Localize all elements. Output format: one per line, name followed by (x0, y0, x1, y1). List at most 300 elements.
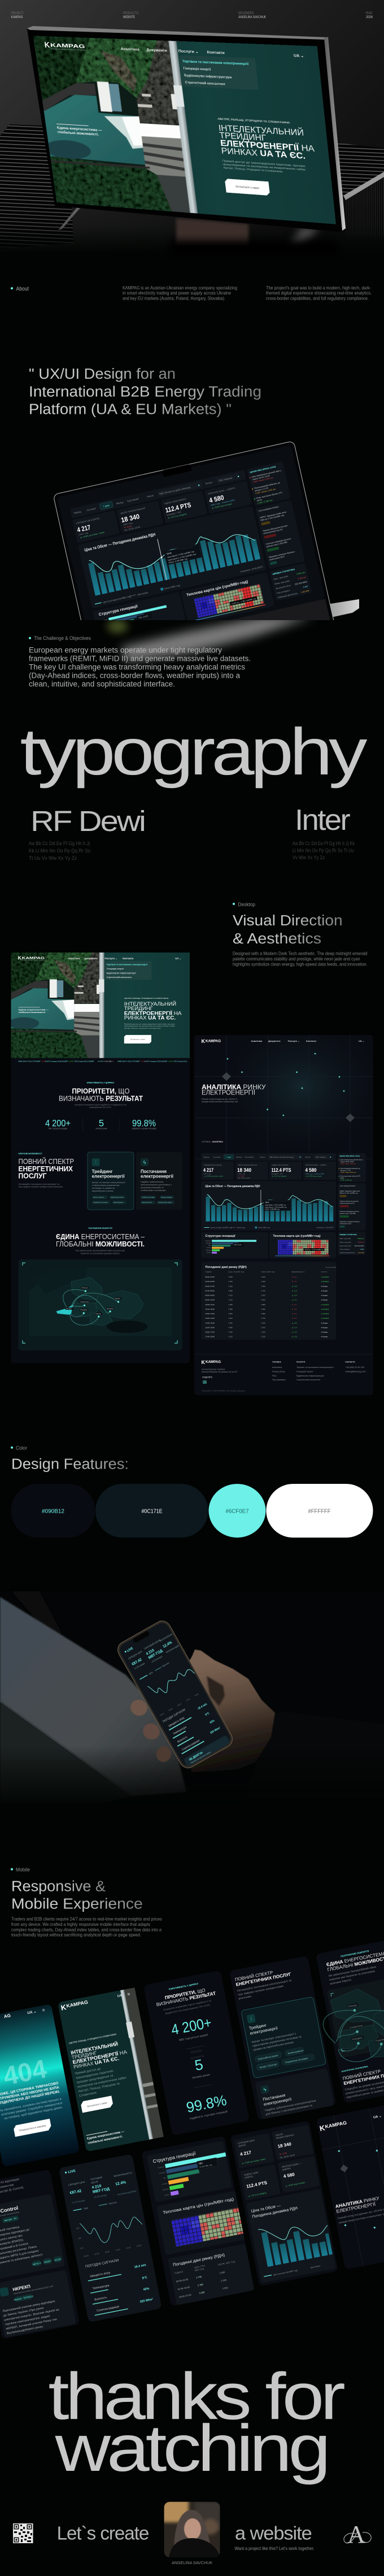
mobile screen: 404: Повернутися в мережу (19, 2124, 47, 2132)
footer: Стратегічний консалтинг (296, 1379, 321, 1381)
ticker: HUPX Hungary €128,40/МВТ +3,4% (145, 1060, 173, 1063)
mobile screen: live market: 4 210 (91, 2184, 102, 2190)
analytics heading: АНАЛІТИКА РИНКУ (202, 1083, 266, 1091)
mobile screen: KPI cards and chart: ІНДЕКС ЦІНИ (244, 2171, 259, 2176)
generation panel: Сонячна (158, 2166, 165, 2169)
section heading: Mobile, Responsive & Mobile Experience (11, 1867, 162, 1938)
phone: 9°C (204, 1712, 211, 1717)
challenge paragraph: The key UI challenge was transforming heavy analytical metrics (29, 663, 245, 672)
mobile screen: live market: ПОГОДНІ СИГНАЛИ (85, 2258, 119, 2269)
mobile screen: services (229, 1956, 337, 2120)
ticker: КИЇВ DAM 4 632,5 ГРН/МВТ -1,2% (117, 1060, 145, 1063)
challenge paragraph (29, 646, 251, 689)
footer: ПОСЛУГИ (296, 1361, 306, 1363)
phone: Прогноз (162, 1661, 169, 1668)
analytics nav: K (201, 1038, 206, 1044)
map panel (18, 1259, 182, 1350)
service card: trading: потоками та цінами на (92, 1187, 115, 1189)
generation panel: ГЕС (199, 2162, 203, 2165)
services heading: ЕНЕРГЕТИЧНИХ (18, 1164, 73, 1173)
section heading: Mobile, Responsive & Mobile Experience: Traders and B2B clients require 24/7 access to real-time market insights and prices (11, 1916, 162, 1922)
about text column 1: KAMPAG is an Austrian-Ukrainian energy company specializing (123, 285, 237, 291)
label: About: About (16, 286, 29, 292)
stats row: 5 (99, 1118, 104, 1128)
phone: Прогноз на наступну годину (190, 1751, 211, 1764)
mobile screen: stats: 4 200+ (170, 2014, 213, 2038)
photo: phone in hand on fabric (0, 1591, 276, 1796)
footer: ГОЛОВНА (272, 1361, 281, 1363)
mobile screen: KPI cards and chart: Ціна сьогодні (грн/МВт·год) (273, 2269, 298, 2276)
mobile screen: live market: Швидкість вітру (90, 2271, 111, 2278)
mobile screen: hero: KAMPAG (66, 1999, 89, 2009)
mobile screen: KPI cards and chart: (BASE) (238, 2143, 247, 2148)
mobile screen: services: Управління потоками (285, 2057, 308, 2064)
heading: priorities: Конкретні показники нашої надійності та відкритості на (75, 1103, 126, 1106)
footer: Торгівля та постачання електроенергії (296, 1366, 334, 1369)
phone: LIVE (126, 1647, 134, 1653)
mobile screen: live market: +2.1% вчора (72, 2199, 85, 2204)
analytics nav: KAMPAG (206, 1039, 221, 1044)
mobile screen: live market: Ціна (84, 2207, 89, 2210)
mobile screen: hero: ТРЕЙДИНГ (71, 2050, 97, 2060)
swatch: #FFFFFF: #FFFFFF (308, 1508, 331, 1515)
mobile screen: hero: глобальні можливості. (88, 2135, 123, 2145)
project meta labels (11, 11, 373, 19)
service card: supply: прозорим ринковим та (141, 1186, 164, 1189)
mobile screen: stats: Надійність торгових операцій (189, 2110, 228, 2121)
services heading: ПОВНИЙ СПЕКТР (18, 1157, 74, 1166)
mobile screen: KPI cards and chart: Ціна вчора (310, 2265, 320, 2269)
mobile screen: services: Європейські ринки (258, 2054, 278, 2060)
mobile screen: live market: 18.4 m/s (134, 2263, 146, 2269)
mobile screen: services: Оптимізуйте постачання електроенергії та (237, 1978, 292, 1993)
mobile screen: regulators: електричної енергії». Власник ліцензії на (4, 2308, 59, 2322)
mobile screen: live market: Температура (92, 2284, 110, 2291)
generation panel (147, 2141, 232, 2202)
ticker: TGE Poland €112,45/МВТ (74, 1060, 94, 1063)
heatmap panel: Теплова карта цін (грн/МВт·год) (162, 2196, 234, 2215)
phone: внутрішньодоб. (165, 1643, 180, 1653)
mobile screen: live market: 9°C (142, 2276, 147, 2280)
mobile screen: KPI cards and chart: ФІНАНСУВАННЯ (276, 2133, 294, 2140)
mobile screen: live market: €87.42 (69, 2189, 82, 2195)
mobile screen: live market: 600 (76, 2227, 80, 2230)
service card: trading: Трейдинг (92, 1169, 113, 1174)
closing title: thanks for watching (48, 2359, 345, 2485)
heading: priorities: ПРІОРИТЕТИ, ЩО (72, 1086, 130, 1096)
mobile screen: services: для бізнесу з прозорим ринковим та (265, 2104, 313, 2116)
ticker: TGE Poland €112 (173, 1060, 187, 1063)
mobile screen: live market: LIVE (68, 2170, 76, 2174)
section heading: Mobile, Responsive & Mobile Experience: touch-friendly layout without sacrificing analytical depth or page speed. (11, 1932, 141, 1938)
analytics heading: ЕЛЕКТРОЕНЕРГІЇ (202, 1089, 256, 1097)
platform: striped stand surface right (333, 142, 384, 198)
mobile screen: services: ефективним управлінням потоками та (252, 2035, 302, 2048)
about text column 1: and key EU markets (Austria, Poland, Hungary, Slovakia). (123, 295, 225, 301)
designer name: ANGELINA SAVCHUK (172, 2560, 212, 2565)
swatch: #090B12: #090B12 (42, 1508, 64, 1515)
mobile screen: live market: внутрішньодобова (117, 2189, 137, 2196)
mobile screen: services: газу завдяки гнучким трейдинговим (238, 1984, 284, 1997)
mobile screen: services: ЕНЕРГЕТИЧНИХ ПОСЛУГ (235, 1972, 292, 1988)
generation panel: Теплова (159, 2171, 165, 2175)
footer: Будівництво інфраструктури (296, 1375, 324, 1377)
phone: СЕРЕДНЯ ЦІНА (128, 1649, 143, 1660)
mobile screen: analytics hero: UA ⌄ (373, 2115, 382, 2119)
analytics heading: трендів енергосистеми в реальному часі. (202, 1101, 238, 1103)
footer: Інтелектуальна торгівля (202, 1368, 225, 1370)
mobile screen: stats: відкритості на енергоринках UA та ЄС. (165, 2003, 211, 2015)
mobile screen: KPI cards and chart: Пік: 18:00–19:00 (280, 2154, 295, 2159)
section heading: Desktop, Visual Direction & Aesthetics: & Aesthetics (233, 931, 321, 947)
mobile screen: hero: UA (117, 1994, 123, 1998)
mobile screen: KPI cards and chart (230, 2120, 338, 2287)
section heading: Color, Design Features: Color (16, 1445, 27, 1452)
mobile screen: hero: ЕЛЕКТРОЕНЕРГІЇ НА (72, 2049, 128, 2065)
analytics nav: Контакти (306, 1040, 316, 1042)
mobile screen: live market: ВОЛАТИЛЬНІСТЬ (114, 2171, 133, 2177)
mobile screen: stats: ВИЗНАЧАЮТЬ РЕЗУЛЬТАТ (156, 1990, 217, 2007)
mobile screen: regulators: ACER (54, 2258, 61, 2262)
mobile screen: hero: АВСТРІЇ, ПОЛЬЩІ, УГОРЩИНИ ТА СЛОВАЧЧИНИ. (69, 2033, 117, 2045)
hand (128, 1649, 275, 1772)
phone: 42% (209, 1719, 216, 1725)
phone: 08:00 (177, 1703, 182, 1707)
mobile screen: KPI cards and chart: ▼ -3.2% (279, 2152, 287, 2155)
mobile screen: map: АНАЛІТИЧНА ПЛАТФОРМА (341, 2066, 368, 2073)
quote heading: " UX/UI Design for an (29, 366, 176, 382)
quote heading: International B2B Energy Trading (29, 384, 261, 400)
mobile screen: regulators: REMIT (44, 2259, 51, 2263)
mobile screen: stats: Активні ринки (192, 2073, 211, 2080)
hero screenshot (8, 953, 190, 1058)
table panel: ЦІНА, ГРН/ (194, 2265, 206, 2269)
table panel: 2 500 (221, 2279, 226, 2282)
section heading: Mobile, Responsive & Mobile Experience: Mobile (16, 1867, 30, 1873)
table panel: 2 500 (219, 2271, 225, 2275)
phone: ЗБ ДВИГУН (189, 1751, 204, 1762)
service card: trading: ⫶ (95, 1160, 97, 1165)
table panel: 2 740 (196, 2275, 202, 2279)
mobile screen: live market (59, 2154, 162, 2322)
footer (201, 1360, 366, 1392)
service card: trading: Імпорт | Експорт (93, 1196, 104, 1198)
mobile screen: 404 (0, 2004, 80, 2167)
footer: КОНТАКТИ (346, 1361, 355, 1363)
heading: unified energy system: ЄДИНА ЕНЕРГОСИСТЕМА – (56, 1232, 145, 1241)
ticker: HUPX Hungary €128,40/МВТ +3,4% (45, 1060, 73, 1063)
footer: Генерація енергії (296, 1370, 313, 1373)
panel: desktop analytics page (194, 1035, 373, 1395)
mobile screen: hero: експертиза на енергетичних хабах (77, 2076, 126, 2089)
generation panel: Імпорт (164, 2193, 170, 2197)
mobile screen: regulators: Внутрішньодобового ринку. (7, 2325, 43, 2335)
service card: supply: Прозорі тарифи (161, 1196, 172, 1198)
mobile screen: stats: Конкретні показники нашої надійності та (163, 1999, 212, 2011)
quote heading: Platform (UA & EU Markets) " (29, 401, 232, 417)
color swatches (11, 1484, 373, 1538)
font sample: RF Dewi: Tt Uu Vv Ww Xx Yy Zz (29, 855, 77, 861)
mobile screen: analytics hero: ЕЛЕКТРОЕНЕРГІЇ (336, 2201, 376, 2214)
about text column 2: The project's goal was to build a modern, high-tech, dark- (266, 285, 371, 291)
service card: trading: європейських ринках. (92, 1189, 114, 1192)
panel: desktop homepage (8, 953, 190, 1363)
mobile screen: KPI cards and chart: 4 580 (283, 2172, 295, 2179)
mobile screen: KPI cards and chart: СЕРЕДНЯ ЦІНА (238, 2138, 255, 2145)
mobile screen: map: країнами Європи. (330, 1978, 352, 1986)
footer: Copyright © 2026 KAMPAG | Всі права захищені (202, 1389, 245, 1392)
mobile screen: hero: Австрії, Польщі, Угорщини та (78, 2082, 120, 2093)
swatch: #0C171E (95, 1484, 208, 1538)
table panel: ГОДИНА (174, 2271, 184, 2275)
stats row (45, 1118, 156, 1129)
mobile screen: 404: 404 (1, 2054, 49, 2091)
phone: 12:00 (185, 1698, 190, 1702)
mobile screen: services: Балансування (287, 2049, 303, 2055)
mobile screen: services: рішенням. (238, 1995, 252, 2001)
phone: 320 W/m² (210, 1726, 221, 1735)
project meta labels: DESIGNERS: (238, 11, 254, 15)
footer: +38 (050) 52 81 030 (346, 1366, 364, 1369)
mobile screen: stats: ЕФЕКТИВНІСТЬ У ЦИФРАХ (169, 1982, 199, 1990)
section heading: Desktop, Visual Direction & Aesthetics (233, 902, 368, 967)
analytics nav: Документи (268, 1040, 281, 1042)
mobile screen: stats: Mobile (190, 2049, 203, 2055)
service card: supply: Надійне забезпечення (141, 1180, 163, 1183)
mobile screen: KPI cards and chart: ЗАВТРА (282, 2167, 291, 2171)
service card: supply: електроенергією для бізнесу з (141, 1183, 172, 1186)
services heading: газу завдяки гнучким трейдинговим рішенням. (18, 1186, 63, 1188)
mobile screen: services: ПОВНИЙ СПЕКТР (234, 1970, 273, 1982)
CTA text: a website: a website (235, 2523, 312, 2544)
phone: Вологість (177, 1735, 188, 1743)
mobile screen: regulators: НКРЕКП (12, 2284, 31, 2292)
mobile screen: 404: ≡ (42, 2007, 46, 2013)
mobile screen: regulators: Україна · ENTSO-E (14, 2294, 34, 2301)
analytics nav: UA ⌄ (359, 1040, 364, 1042)
mobile screen: live market: 00:00 (84, 2254, 89, 2258)
mobile screen: live market: +6.3% вчора (93, 2193, 107, 2199)
swatch: #0C171E: #0C171E (141, 1508, 163, 1515)
mobile screen: KPI cards and chart: Ціна та Обсяг — (251, 2203, 281, 2214)
mobile screen: live market: 16:00 (126, 2246, 131, 2249)
mobile screen: live market: 200 (80, 2247, 84, 2250)
table panel: 2 500 (222, 2286, 228, 2290)
table panel: 3 200 (199, 2291, 205, 2294)
phone: ВОЛАТИЛЬНІСТЬ (159, 1631, 176, 1642)
section heading: Mobile, Responsive & Mobile Experience: from any device. We crafted a highly responsive mobile interface that adapts (11, 1921, 150, 1927)
table panel: 06:00–07:00 (179, 2293, 191, 2298)
ticker: КИЇВ DAM 4 632,5 ГРН/МВТ -1,2% (18, 1060, 46, 1063)
section heading: Desktop, Visual Direction & Aesthetics: Designed with a Modern Dark Tech aesthetic. The deep midnight emerald (233, 951, 368, 956)
font sample: RF Dewi: RF Dewi (30, 805, 145, 837)
project meta labels: WEBSITE (123, 15, 135, 19)
phone: 12.4% (162, 1640, 173, 1649)
mobile screen: KPI cards and chart: ▲ +6.8% до попер. тижня (242, 2158, 266, 2164)
font sample: RF Dewi (29, 805, 145, 861)
mobile screen: services: цінами на європейських ринках. (253, 2040, 295, 2052)
about section (11, 285, 372, 301)
font sample: Inter: Ll Mm Nn Oo Pp Qq Rr Ss Tt Uu (293, 847, 354, 854)
mobile screen: services: Постачання (262, 2093, 286, 2102)
phone: 00:00 (160, 1712, 165, 1717)
monitor frame (27, 26, 346, 232)
closing title: thanks for watching: watching (54, 2411, 327, 2485)
phone: ТОРГОВИЙ ОБСЯГ (143, 1638, 162, 1650)
font sample: RF Dewi: Kk Ll Mm Nn Oo Pp Qq Rr Ss (29, 847, 90, 854)
project meta labels: KAMPAG (11, 15, 23, 19)
section: hero background (0, 0, 384, 286)
project meta labels: 2026 (366, 15, 373, 19)
mobile screen: map: ПОВНИЙ СПЕКТР (342, 2069, 381, 2081)
services heading (18, 1153, 74, 1188)
table panel: МВТ·ГОД (195, 2268, 204, 2272)
ticker: UA-IPS 4 632 МВт·г (98, 1060, 114, 1063)
heading: unified energy system: ГЛОБАЛЬНІ МОЖЛИВОСТІ. (56, 1240, 145, 1248)
mobile screen: live market: 20:00 (136, 2244, 142, 2248)
mobile screen: services: Імпорт | Експорт (259, 2063, 277, 2069)
mobile screen: 404: на головну, щоб відновити подачу даних. (4, 2106, 64, 2120)
mobile screen: hero (58, 1988, 164, 2152)
phone: МВТ·ГОД (148, 1649, 164, 1660)
mobile screen: 404: ПІДКЛЮЧЕНА ДО НАШОЇ МЕРЕЖІ. (0, 2089, 60, 2105)
about text column 2 (266, 285, 372, 301)
table panel: 00:00–01:00 (176, 2278, 189, 2283)
footer: електроенергією на ринках UA та ЄС. (202, 1371, 238, 1373)
mobile screen: map: енергією між Україною та ключовими (329, 1969, 376, 1982)
mobile screen: live market: 08:00 (105, 2250, 110, 2254)
heading: unified energy system: ГЕОГРАФІЧНЕ ПОКРИТТЯ (88, 1227, 112, 1229)
mobile screen: regulators: торгівлю електроенергією, видані (5, 2314, 50, 2327)
map panel: Австрія (66, 1308, 72, 1310)
mobile screen: live market: 12.4% (115, 2180, 126, 2187)
mobile screen: regulators: Ліцензований учасник ринку відповідно (2, 2299, 55, 2313)
mobile screen: live market: Сонячна радіація (97, 2305, 120, 2313)
mobile screen: hero: Єдина енергосистема — (86, 2130, 125, 2141)
table panel: 2 780 (198, 2283, 203, 2287)
service card: supply: стабільними поставками. (141, 1189, 167, 1192)
swatch: #090B12 (11, 1484, 95, 1538)
footer: Аналітика (272, 1366, 282, 1369)
analytics heading: Повний огляд погодинних цін, обсягів та (202, 1098, 237, 1100)
mobile screen: services: ϟ (263, 2086, 267, 2093)
mobile screen: KPI cards and chart: 4 217 (239, 2150, 252, 2157)
mobile screen: analytics hero: Повний огляд погодинних цін, обсягів та (337, 2207, 384, 2220)
mobile screen: stats (143, 1970, 250, 2136)
heading: priorities (59, 1082, 143, 1109)
mobile screen: live market: МВТ·ГОД (93, 2187, 110, 2194)
analytics heading (202, 1083, 266, 1103)
services heading: Оптимізуйте постачання електроенергії та (18, 1183, 60, 1185)
table panel (168, 2244, 254, 2305)
quote heading (29, 366, 261, 417)
phone: €87.42 (131, 1657, 143, 1666)
portrait photo (162, 2500, 220, 2557)
mobile screen: stats: ПРІОРИТЕТИ, ЩО (164, 1987, 206, 2001)
mobile screen: KPI cards and chart: (INDEX) (245, 2175, 254, 2179)
mobile screen: 404: Не хвилюйтеся, основна система працює в (0, 2097, 62, 2113)
mobile screen: services: електроенергії (263, 2097, 292, 2107)
swatch: #6CF0E7 (209, 1484, 265, 1538)
mobile screen: services: ⫶ (250, 2016, 252, 2022)
section heading: Desktop, Visual Direction & Aesthetics: highlights symbolize clean energy, high-speed data feeds, and innovation. (233, 961, 367, 967)
mobile screen: hero: Прямий доступ до (75, 2067, 101, 2076)
monitor stand (169, 218, 339, 257)
mobile screen: analytics hero (316, 2099, 384, 2270)
phone: Швидкість вітру (168, 1716, 185, 1728)
section heading: Mobile, Responsive & Mobile Experience: Responsive & (11, 1879, 106, 1895)
heading: unified energy system: Ми забезпечуємо безперебійний обмін енергією між (76, 1249, 125, 1252)
service card: trading: електроенергії (92, 1174, 125, 1179)
mobile screen: hero: ІНТЕЛЕКТУАЛЬНИЙ (70, 2041, 119, 2056)
mobile screen: regulators: до Закону України «Про ринок (3, 2306, 45, 2318)
project meta labels: PRODUCTS: (123, 11, 139, 15)
service card: trading: з ефективним управлінням (92, 1184, 120, 1187)
laptop reflection smear (107, 616, 313, 661)
mobile screen: live market: Вологість (94, 2296, 107, 2302)
CTA text: Let's create: Let`s create (57, 2523, 149, 2544)
mobile screen: KPI cards and chart: ▲ +8.6% від сьогодні (285, 2181, 306, 2187)
phone: 04:00 (168, 1708, 173, 1712)
about text column 1: in smart electricity trading and power supply across Ukraine (123, 290, 231, 296)
mobile screen: services: Надійне забезпечення електроенергією (265, 2098, 316, 2112)
swatch: #FFFFFF (266, 1484, 373, 1538)
section heading: Color, Design Features (11, 1445, 129, 1473)
challenge paragraph: clean, intuitive, and sophisticated interface. (29, 679, 175, 689)
CTA text: a website (235, 2523, 314, 2551)
QR code (13, 2523, 33, 2543)
service card: supply: Постачання (141, 1169, 167, 1174)
project meta labels: YEAR: (365, 11, 373, 15)
footer: K (201, 1360, 206, 1365)
mobile screen: services: Трейдинг (248, 2023, 267, 2031)
analytics dashboard (201, 1153, 366, 1340)
mobile screen: hero: Словаччини. (79, 2091, 98, 2098)
service card: supply (136, 1152, 182, 1210)
heading: priorities: ВИЗНАЧАЮТЬ РЕЗУЛЬТАТ (59, 1094, 143, 1102)
table panel: 01:00–02:00 (177, 2285, 190, 2291)
monitor screen in perspective (33, 36, 336, 224)
mobile screen: hero: транскордонних перетинів, (76, 2070, 115, 2080)
mobile screen: analytics hero: K (319, 2123, 326, 2133)
swatch: #6CF0E7: #6CF0E7 (226, 1508, 249, 1515)
service card: trading: Балансування (114, 1201, 124, 1203)
mobile screen: regulators: MiFID II (33, 2262, 41, 2266)
footer: Про компанію (272, 1379, 286, 1381)
heading: priorities: енергоринках UA та ЄС. (89, 1106, 112, 1109)
services heading: КЛЮЧОВІ МОЖЛИВОСТІ (18, 1153, 42, 1155)
mobile screen: map: ГЕОГРАФІЧНЕ ПОКРИТТЯ (341, 1950, 369, 1958)
mobile screen: 404: штатному режимі. Спробуйте повернутися (1, 2101, 63, 2117)
CTA text: a website: Want a project like this? Let's work together. (235, 2545, 314, 2551)
stats row: МВт торгується щодня (49, 1127, 67, 1129)
section heading: Mobile, Responsive & Mobile Experience: complex trading charts, Day-Ahead index tables, and cross-border flow data into a (11, 1926, 162, 1932)
mobile screen: live market: ТОРГОВИЙ (90, 2176, 102, 2181)
table panel: ОБСЯГ, МВТ·ГОД (217, 2261, 235, 2266)
section heading: Desktop, Visual Direction & Aesthetics: Visual Direction (233, 913, 343, 929)
stats row: Активні ринки (95, 1127, 107, 1129)
stats row: 99.8% (132, 1118, 156, 1128)
mobile screen: live market: 04:00 (94, 2253, 99, 2255)
platform: striped stand surface left (0, 124, 73, 249)
closing title: thanks for watching: thanks for (48, 2359, 345, 2433)
designer monogram logo: A (347, 2521, 365, 2548)
phone: Ціна (148, 1670, 154, 1676)
designer monogram logo (344, 2521, 371, 2548)
service card: supply: електроенергії (141, 1174, 174, 1179)
about text column 1 (123, 285, 237, 301)
phone: ПОГОДНІ СИГНАЛИ (162, 1708, 186, 1724)
